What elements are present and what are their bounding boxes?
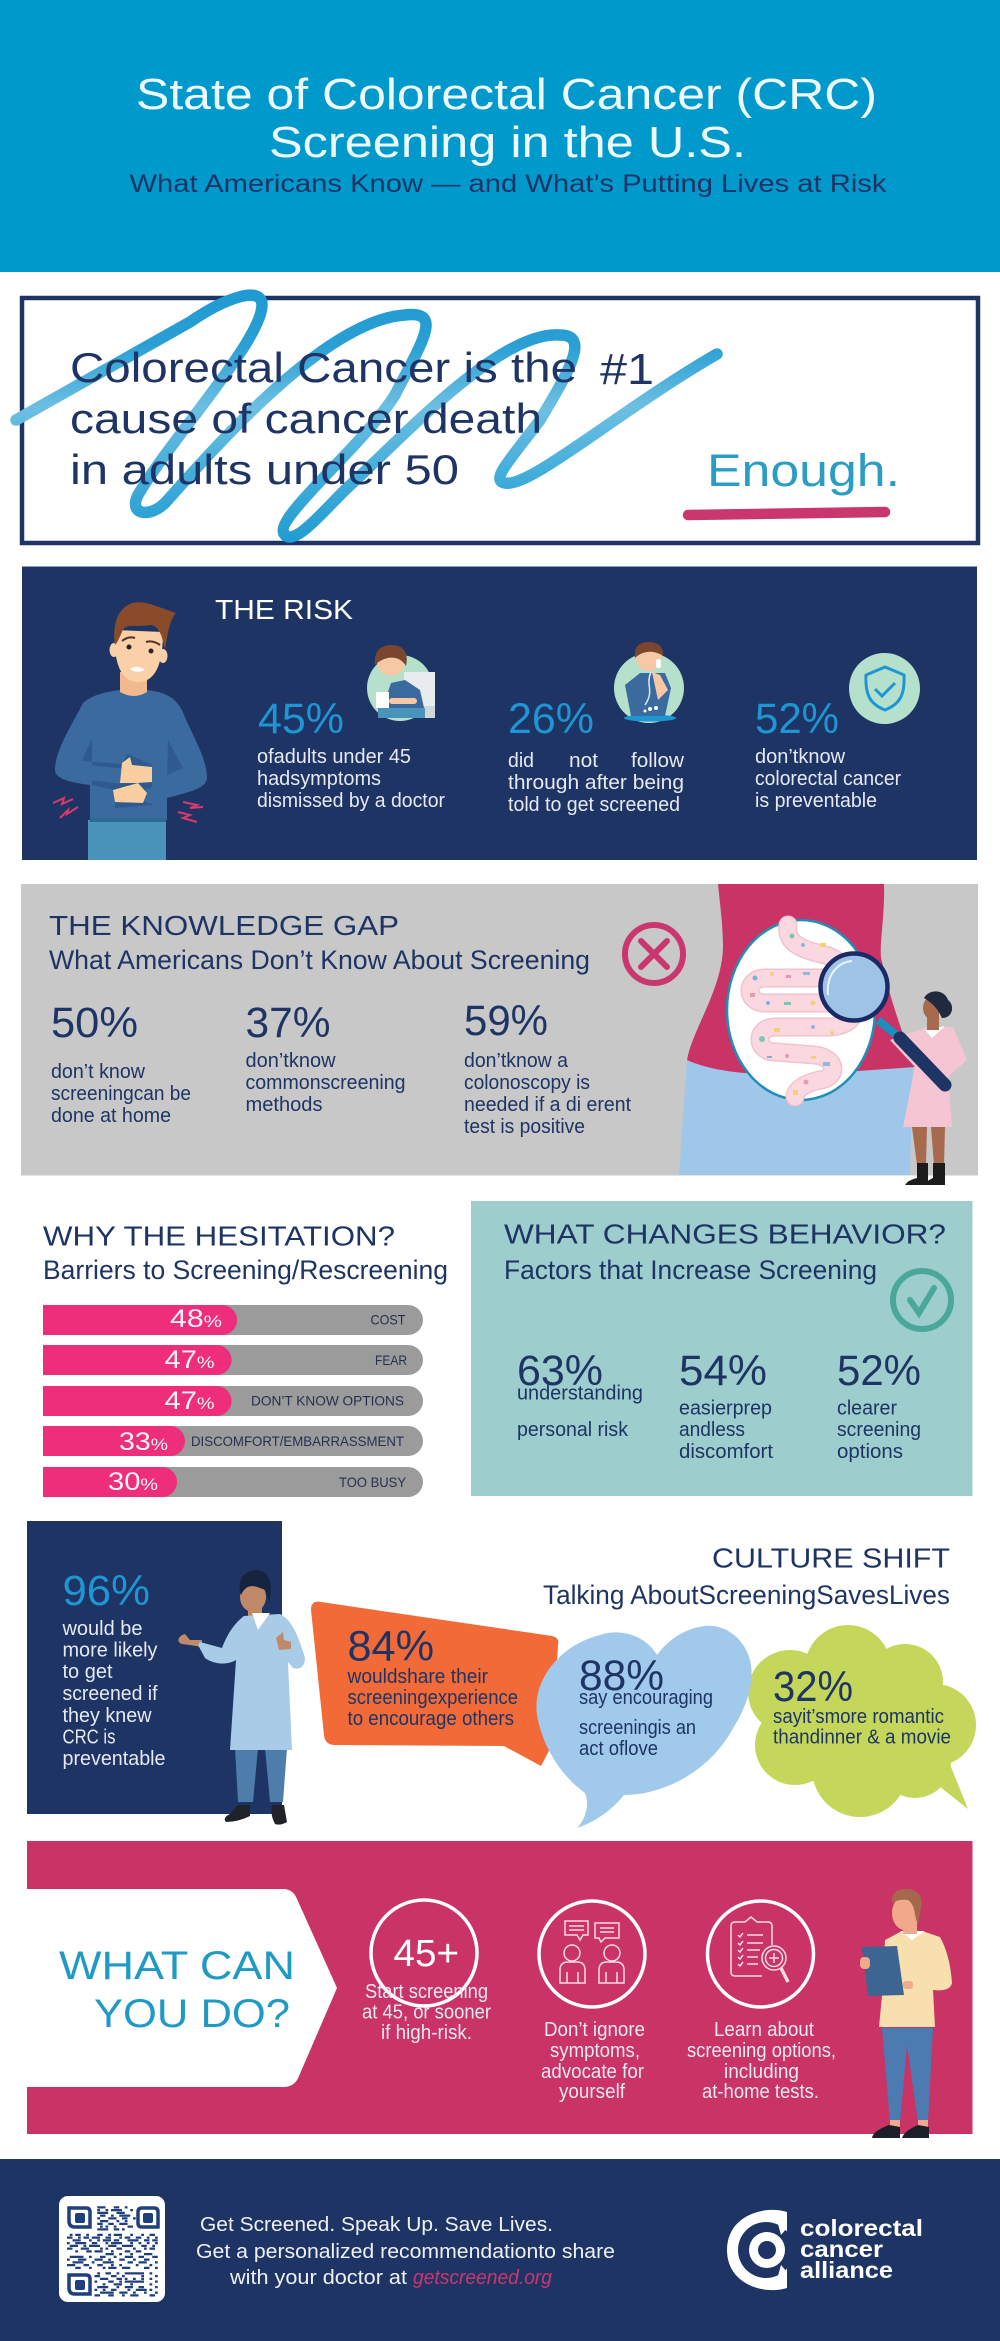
stat: 50 percent: done at home bbox=[51, 1105, 171, 1127]
icon: person on toilet bbox=[367, 645, 435, 721]
call to action text: Get a personalized recommendationto share bbox=[196, 2241, 615, 2263]
headline statement: cause of cancer death bbox=[70, 395, 542, 442]
icon: two people talking bbox=[560, 1921, 624, 1983]
bar chart: 48 % bbox=[170, 1305, 222, 1333]
action: start screening bbox=[362, 1900, 491, 2044]
subheading: What Americans Don’t Know About Screening bbox=[49, 945, 590, 975]
headline statement: in adults under 50 bbox=[70, 446, 459, 493]
panel: the risk bbox=[22, 566, 977, 860]
stat: 26 percent bbox=[508, 642, 685, 816]
title: State of Colorectal Cancer (CRC) bbox=[136, 70, 877, 119]
pink underline bbox=[688, 512, 885, 515]
heading: THE KNOWLEDGE GAP bbox=[49, 910, 399, 941]
call to action text: Get Screened. Speak Up. Save Lives. bbox=[200, 2214, 553, 2236]
logo: colorectal cancer alliance: colorectal bbox=[800, 2215, 923, 2241]
action: learn options: at-home tests. bbox=[702, 2081, 819, 2103]
action: learn options: screening options, bbox=[687, 2040, 836, 2062]
icon: person on phone bbox=[614, 642, 684, 723]
white arrow label bbox=[27, 1889, 337, 2087]
stat: 52 percent: options bbox=[837, 1441, 903, 1463]
illustration: doctor in lab coat bbox=[178, 1570, 305, 1825]
icon: pain sparks bbox=[53, 798, 203, 822]
bubble: orange 84 percent: screeningexperience bbox=[348, 1687, 518, 1709]
bar chart: 47 % bbox=[164, 1387, 214, 1415]
bubble: orange 84 percent: to encourage others bbox=[348, 1708, 514, 1730]
headline statement: #1 bbox=[600, 345, 654, 394]
intestine bbox=[750, 925, 852, 1097]
subheading: Barriers to Screening/Rescreening bbox=[43, 1255, 448, 1285]
action: advocate: symptoms, bbox=[550, 2040, 640, 2062]
action: advocate bbox=[539, 1901, 645, 2103]
stat: 59 percent bbox=[464, 997, 631, 1138]
stat: 37 percent: commonscreening bbox=[246, 1072, 406, 1094]
illustration: woman with clipboard bbox=[860, 1889, 952, 2138]
icon: shield check bbox=[849, 653, 920, 724]
stat: 26 percent: did bbox=[508, 750, 534, 772]
stat: 50 percent: 50% bbox=[51, 999, 138, 1047]
logo: colorectal cancer alliance: alliance bbox=[800, 2257, 893, 2283]
heading: WHY THE HESITATION? bbox=[43, 1220, 395, 1252]
stat: 59 percent: 59% bbox=[464, 997, 548, 1045]
stat: 26 percent: follow bbox=[631, 750, 685, 772]
stat: 52 percent: 52% bbox=[837, 1347, 921, 1395]
header banner bbox=[0, 0, 1000, 272]
navy card: 96 percent: they knew bbox=[62, 1705, 152, 1727]
call to action text: with your doctor at bbox=[229, 2267, 407, 2289]
bubble: orange 84 percent: wouldshare their bbox=[347, 1666, 488, 1688]
stat: 52 percent: is preventable bbox=[755, 790, 877, 812]
subheading: Talking AboutScreeningSavesLives bbox=[543, 1580, 950, 1610]
bubble: blue heart 88 percent bbox=[536, 1626, 752, 1828]
action: advocate: Don’t ignore bbox=[544, 2019, 645, 2041]
blue scribble bbox=[16, 295, 717, 537]
bubble: green cloud 32 percent: sayit’smore romantic bbox=[773, 1706, 944, 1728]
stat: 26 percent: told to get screened bbox=[508, 794, 680, 816]
stat: 26 percent: not bbox=[569, 750, 598, 772]
subheading: Factors that Increase Screening bbox=[504, 1255, 877, 1285]
panel: what can you do bbox=[27, 1841, 972, 2138]
stat: 52 percent bbox=[837, 1347, 921, 1463]
icon: clipboard and magnifier bbox=[731, 1917, 788, 1982]
stat: 63 percent: 63% bbox=[517, 1347, 603, 1395]
call to action text: getscreened.org bbox=[413, 2267, 552, 2289]
stat: 52 percent: 52% bbox=[755, 695, 839, 743]
bubble: blue heart 88 percent: act oflove bbox=[579, 1738, 658, 1760]
stat: 54 percent bbox=[679, 1347, 773, 1463]
navy card: 96 percent bbox=[27, 1521, 282, 1814]
panel: culture shift bbox=[27, 1521, 976, 1828]
action: learn options: including bbox=[724, 2061, 799, 2083]
navy card: 96 percent: more likely bbox=[62, 1640, 158, 1662]
stat: 52 percent: don’tknow bbox=[755, 746, 846, 768]
bar chart: COST bbox=[370, 1312, 406, 1328]
title: Screening in the U.S. bbox=[269, 118, 746, 167]
bar chart bbox=[43, 1305, 423, 1497]
bubble: green cloud 32 percent bbox=[748, 1625, 976, 1817]
stat: 45 percent: dismissed by a doctor bbox=[257, 790, 445, 812]
stat: 63 percent: personal risk bbox=[517, 1419, 629, 1441]
stat: 37 percent: don’tknow bbox=[246, 1050, 336, 1072]
illustration: body with intestine under magnifier bbox=[679, 884, 967, 1185]
bubble: green cloud 32 percent: thandinner & a movie bbox=[773, 1726, 951, 1748]
stat: 50 percent bbox=[51, 999, 191, 1127]
bubble: orange 84 percent bbox=[311, 1602, 558, 1766]
heading: WHAT CHANGES BEHAVIOR? bbox=[504, 1218, 946, 1250]
bubble: orange 84 percent: 84% bbox=[348, 1622, 434, 1670]
white arrow label: YOU DO? bbox=[94, 1992, 290, 2036]
stat: 45 percent: 45% bbox=[258, 695, 344, 743]
bubble: blue heart 88 percent: screeningis an bbox=[579, 1717, 696, 1739]
navy card: 96 percent: to get bbox=[62, 1661, 113, 1683]
icon: x mark bbox=[625, 925, 683, 983]
logo: colorectal cancer alliance bbox=[727, 2210, 923, 2290]
stat: 59 percent: needed if a di erent bbox=[464, 1094, 631, 1116]
stat: 50 percent: don’t know bbox=[51, 1061, 146, 1083]
logo: colorectal cancer alliance: cancer bbox=[800, 2236, 883, 2262]
stat: 26 percent: 26% bbox=[508, 695, 594, 743]
action: learn options: Learn about bbox=[714, 2019, 814, 2041]
stat: 59 percent: colonoscopy is bbox=[464, 1072, 590, 1094]
navy card: 96 percent: CRC is bbox=[62, 1726, 116, 1748]
heading: CULTURE SHIFT bbox=[712, 1542, 950, 1574]
heading: THE RISK bbox=[215, 594, 353, 625]
action: advocate: advocate for bbox=[541, 2061, 644, 2083]
stat: 37 percent: methods bbox=[246, 1094, 322, 1116]
icon: check mark bbox=[893, 1271, 951, 1329]
navy card: 96 percent: 96% bbox=[62, 1567, 150, 1615]
stat: 45 percent: hadsymptoms bbox=[257, 768, 381, 790]
stat: 59 percent: don’tknow a bbox=[464, 1050, 569, 1072]
bar chart: 33% bbox=[119, 1428, 168, 1456]
footer bbox=[0, 2159, 1000, 2341]
title bbox=[136, 70, 877, 167]
action: learn options bbox=[687, 1901, 836, 2103]
stat: 45 percent: ofadults under 45 bbox=[257, 746, 411, 768]
woman doctor bbox=[890, 991, 967, 1185]
headline statement: Colorectal Cancer is the bbox=[70, 344, 577, 391]
bar chart: 30 % bbox=[108, 1468, 158, 1496]
bar chart: FEAR bbox=[375, 1352, 407, 1368]
enough word: Enough. bbox=[707, 445, 900, 496]
subtitle: What Americans Know — and What’s Putting Lives at Risk bbox=[130, 170, 887, 198]
stat: 54 percent: andless bbox=[679, 1419, 745, 1441]
bar chart: 47 % bbox=[164, 1346, 214, 1374]
panel: enough callout bbox=[16, 295, 978, 543]
stat: 37 percent: 37% bbox=[246, 999, 330, 1047]
stat: 63 percent bbox=[517, 1347, 643, 1441]
stat: 26 percent: through after being bbox=[508, 772, 684, 794]
panel: why the hesitation bbox=[43, 1220, 448, 1497]
stat: 59 percent: test is positive bbox=[464, 1116, 585, 1138]
action: advocate: yourself bbox=[559, 2081, 625, 2103]
stat: 63 percent: understanding bbox=[517, 1382, 643, 1404]
stat: 52 percent bbox=[755, 653, 920, 812]
action: start screening: at 45, or sooner bbox=[362, 2002, 491, 2024]
action: start screening: if high-risk. bbox=[381, 2022, 472, 2044]
stat: 45 percent bbox=[257, 645, 445, 812]
call to action text bbox=[196, 2214, 615, 2289]
navy card: 96 percent: screened if bbox=[62, 1683, 158, 1705]
stat: 37 percent bbox=[246, 999, 406, 1116]
panel: what changes behavior bbox=[471, 1201, 972, 1496]
bar chart: DISCOMFORT/EMBARRASSMENT bbox=[191, 1433, 404, 1449]
bubble: blue heart 88 percent: 88% bbox=[579, 1652, 664, 1700]
navy card: 96 percent: preventable bbox=[62, 1748, 166, 1770]
icon: man with stomach pain bbox=[53, 602, 207, 860]
stat: 54 percent: easierprep bbox=[679, 1398, 772, 1420]
magnifier bbox=[820, 954, 945, 1085]
bar chart: DON’T KNOW OPTIONS bbox=[251, 1392, 404, 1408]
stat: 54 percent: discomfort bbox=[679, 1441, 773, 1463]
bar chart: TOO BUSY bbox=[339, 1474, 407, 1490]
bubble: blue heart 88 percent: say encouraging bbox=[579, 1687, 713, 1709]
action: start screening: Start screening bbox=[365, 1981, 488, 2003]
stat: 50 percent: screeningcan be bbox=[51, 1083, 191, 1105]
qr code bbox=[59, 2196, 165, 2302]
stat: 52 percent: clearer bbox=[837, 1398, 897, 1420]
stat: 52 percent: colorectal cancer bbox=[755, 768, 901, 790]
white arrow label: WHAT CAN bbox=[59, 1944, 295, 1988]
stat: 54 percent: 54% bbox=[679, 1347, 767, 1395]
headline statement bbox=[70, 344, 654, 493]
stat: 52 percent: screening bbox=[837, 1419, 921, 1441]
panel: the knowledge gap bbox=[21, 884, 978, 1185]
navy card: 96 percent: would be bbox=[62, 1618, 143, 1640]
bubble: green cloud 32 percent: 32% bbox=[773, 1663, 853, 1711]
action: start screening: 45+ bbox=[394, 1933, 459, 1975]
